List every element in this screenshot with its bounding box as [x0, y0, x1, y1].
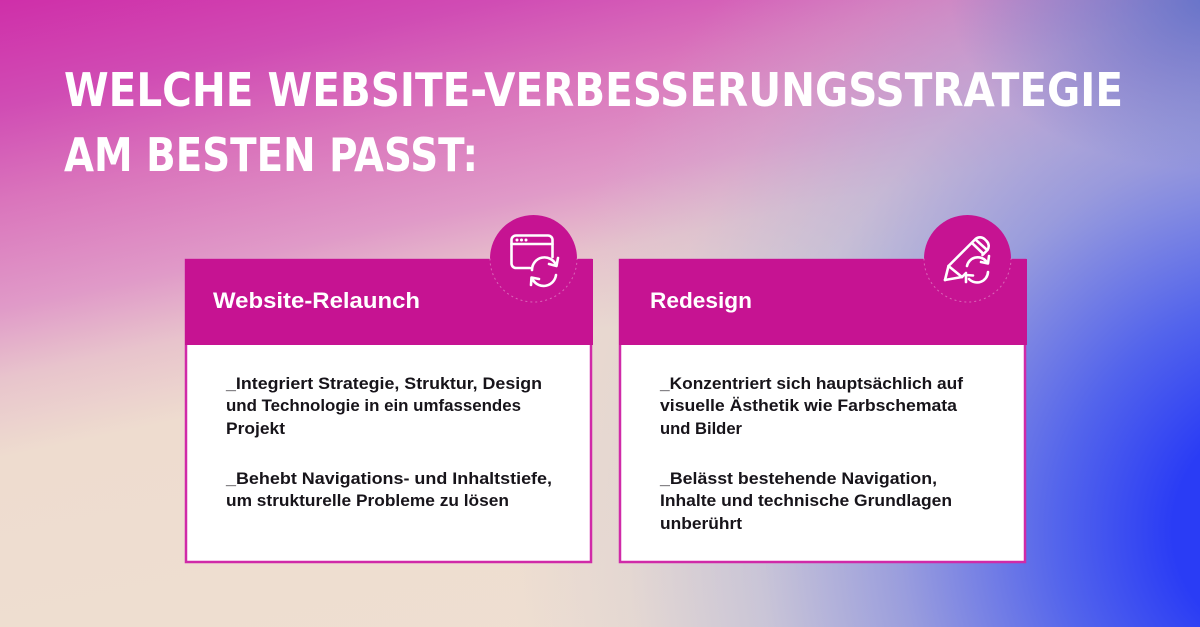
icon: browser window with refresh arrows — [490, 215, 577, 302]
panel heading: Website-Relaunch — [213, 288, 420, 313]
text block: relaunch points: und Technologie in ein umfassendes — [226, 396, 521, 415]
panel header band — [619, 259, 1027, 345]
panel: Website-Relaunch — [185, 215, 593, 562]
text block: relaunch points: _Integriert Strategie, Struktur, Design — [225, 374, 542, 393]
panel body — [186, 260, 591, 562]
text block: relaunch points: Projekt — [226, 419, 285, 438]
text block: redesign points: Inhalte und technische Grundlagen — [660, 491, 952, 510]
text block: redesign points: unberührt — [660, 514, 742, 533]
panel body — [620, 260, 1025, 562]
text block: relaunch points — [225, 374, 552, 510]
title: AM BESTEN PASST: — [64, 128, 478, 182]
text block: redesign points: _Konzentriert sich hauptsächlich auf — [659, 374, 963, 393]
title — [64, 63, 1123, 182]
panel header band — [185, 259, 593, 345]
text block: redesign points — [659, 374, 963, 533]
icon: pencil with refresh arrows — [924, 215, 1011, 302]
text block: redesign points: und Bilder — [660, 419, 742, 438]
text block: redesign points: _Belässt bestehende Navigation, — [659, 469, 937, 488]
panel heading: Redesign — [650, 288, 752, 313]
text block: relaunch points: _Behebt Navigations- und Inhaltstiefe, — [225, 469, 552, 488]
panel: Redesign — [619, 215, 1027, 562]
text block: relaunch points: um strukturelle Probleme zu lösen — [226, 491, 509, 510]
text block: redesign points: visuelle Ästhetik wie Farbschemata — [660, 396, 958, 415]
